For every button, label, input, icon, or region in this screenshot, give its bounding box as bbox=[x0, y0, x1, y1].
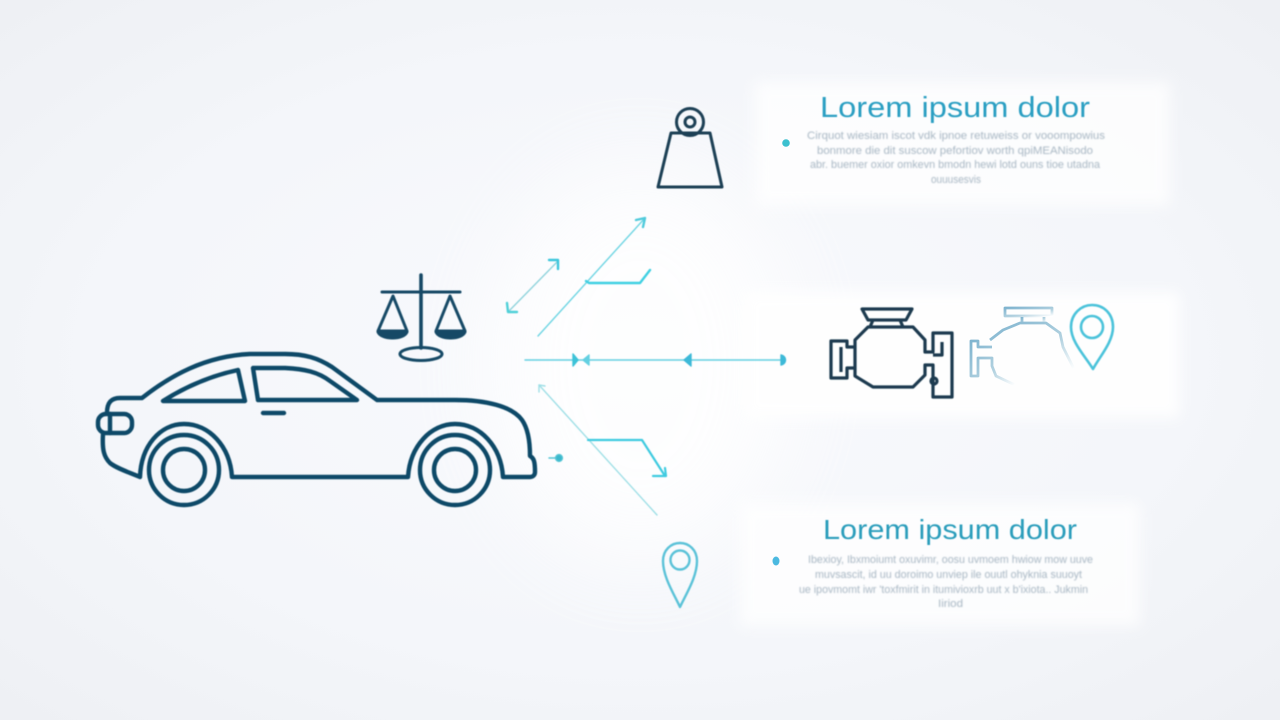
icon: balance scale bbox=[378, 275, 465, 360]
icon: car bbox=[98, 354, 535, 505]
body text: top: bonmore die dit suscow pefortiov worth qpiMEANisodo bbox=[817, 145, 1093, 157]
text block: bottom bbox=[772, 514, 1093, 610]
body text: bottom: Iiriod bbox=[938, 598, 963, 610]
body text: top: ouuusesvis bbox=[931, 174, 981, 186]
icon: faded engine bbox=[971, 308, 1074, 385]
bullet dot: bottom bbox=[772, 556, 780, 566]
arrow: small dot by bumper bbox=[549, 455, 562, 461]
arrows bbox=[507, 218, 786, 515]
body text: top: abr. buemer oxior omkevn bmodn hewi lotd ouns tioe utadna bbox=[810, 159, 1101, 171]
panel: middle backdrop bbox=[745, 292, 1180, 418]
icon: map pin bottom bbox=[663, 543, 697, 607]
body text: top bbox=[807, 130, 1106, 186]
body text: bottom bbox=[799, 554, 1093, 610]
arrow: upper long diagonal bbox=[538, 218, 645, 336]
body text: bottom: muvsascit, id uu doroimo unviep ile ouutl ohyknia suuoyt bbox=[815, 569, 1082, 581]
icon: map pin right bbox=[1071, 305, 1113, 369]
heading: top: Lorem ipsum dolor bbox=[820, 92, 1090, 124]
icon: weight bbox=[658, 108, 722, 187]
arrow: lower elbow bbox=[588, 440, 666, 476]
body text: top: Cirquot wiesiam iscot vdk ipnoe retuweiss or vooompowius bbox=[807, 130, 1106, 142]
central glow bbox=[490, 165, 790, 565]
panel: top text backdrop bbox=[755, 82, 1170, 206]
body text: bottom: Ibexioy, Ibxmoiumt oxuvimr, oosu uvmoem hwiow mow uuve bbox=[808, 554, 1093, 566]
arrow: upper elbow bbox=[586, 270, 650, 283]
bullet dot: top bbox=[782, 139, 790, 147]
arrow: upper left double bbox=[507, 260, 558, 312]
arrow: lower long diagonal bbox=[539, 385, 657, 515]
panel: bottom text backdrop bbox=[740, 503, 1140, 626]
arrow: horizontal line with markers bbox=[525, 354, 786, 366]
body text: bottom: ue ipovmomt iwr 'toxfmirit in itumivioxrb uut x b'ixiota.. Jukmin bbox=[799, 584, 1088, 596]
icon: engine bbox=[831, 309, 952, 397]
text block: top bbox=[782, 92, 1106, 186]
heading: bottom: Lorem ipsum dolor bbox=[823, 514, 1077, 545]
